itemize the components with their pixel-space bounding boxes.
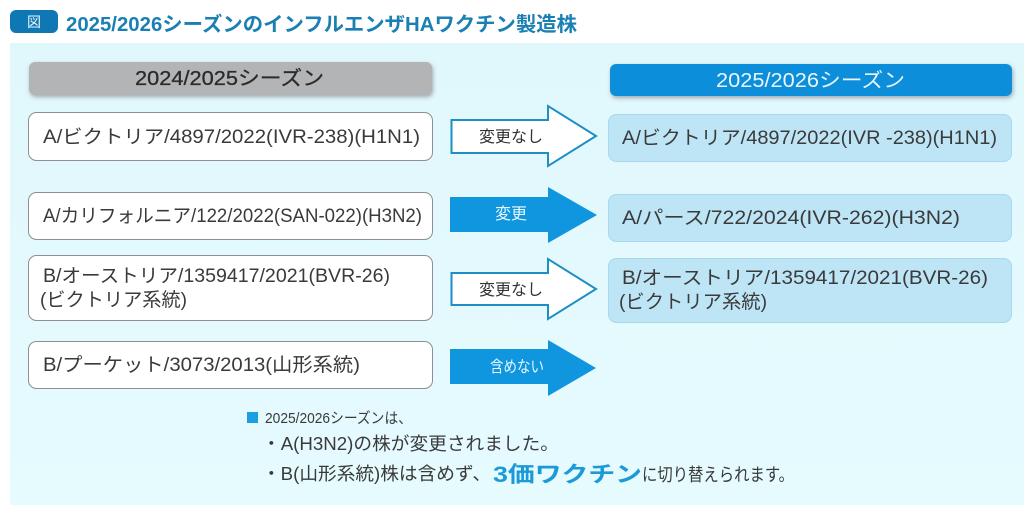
strain: A/Victoria: A/ビクトリア/4897/2022(IVR -238)(H1N1) xyxy=(622,127,997,149)
header: 2024/2025 season: 2024/2025シーズン xyxy=(135,67,324,90)
arrow: no change 2 xyxy=(452,259,596,319)
arrow: no change 2: 変更なし xyxy=(479,281,543,299)
strain: A/Victoria xyxy=(28,112,432,160)
figure badge: 図 xyxy=(27,14,41,30)
strain: A/Victoria xyxy=(608,114,1012,162)
arrow: not included: 含めない xyxy=(490,358,544,376)
arrow: no change 1 xyxy=(452,106,596,166)
panel: 2025/2026 season xyxy=(608,64,1012,322)
strain: B/Phuket: B/プーケット/3073/2013(山形系統) xyxy=(43,354,360,376)
strain: B/Austria: B/オーストリア/1359417/2021(BVR-26) xyxy=(622,268,988,289)
header: 2025/2026 season: 2025/2026シーズン xyxy=(716,69,905,92)
highlight: trivalent vaccine: 3価ワクチン xyxy=(493,462,642,487)
strain: A/Victoria: A/ビクトリア/4897/2022(IVR-238)(H1N1) xyxy=(43,126,420,148)
title: 2025/2026シーズンのインフルエンザHAワクチン製造株 xyxy=(66,12,577,36)
arrow: changed: 変更 xyxy=(495,205,527,223)
arrow: no change 1: 変更なし xyxy=(479,128,543,146)
summary note xyxy=(247,410,794,487)
strain: A/Perth: A/パース/722/2024(IVR-262)(H3N2) xyxy=(622,208,960,229)
icon: square bullet xyxy=(247,412,258,423)
strain: A/California xyxy=(28,192,432,240)
arrow: changed xyxy=(450,187,597,243)
note line 3: ・B(山形系統)株は含めず、 xyxy=(262,464,491,484)
figure badge xyxy=(10,10,58,33)
arrow: not included xyxy=(450,340,596,396)
strain: B/Austria: (ビクトリア系統) xyxy=(619,291,767,313)
strain: A/Perth xyxy=(608,194,1012,242)
panel: 2024/2025 season xyxy=(28,62,432,388)
strain: B/Phuket xyxy=(28,342,432,388)
note line 2: ・A(H3N2)の株が変更されました。 xyxy=(262,434,559,454)
header: 2025/2026 season xyxy=(610,64,1012,96)
strain: B/Austria xyxy=(608,258,1012,322)
strain: B/Austria: (ビクトリア系統) xyxy=(40,289,187,311)
strain: A/California: A/カリフォルニア/122/2022(SAN-022)(H3N2) xyxy=(43,206,422,227)
strain: B/Austria xyxy=(28,256,432,320)
strain: B/Austria: B/オーストリア/1359417/2021(BVR-26) xyxy=(43,266,390,287)
note line 1: 2025/2026シーズンは、 xyxy=(265,410,412,427)
note line 3 end: に切り替えられます。 xyxy=(642,465,794,485)
header: 2024/2025 season xyxy=(29,62,432,95)
